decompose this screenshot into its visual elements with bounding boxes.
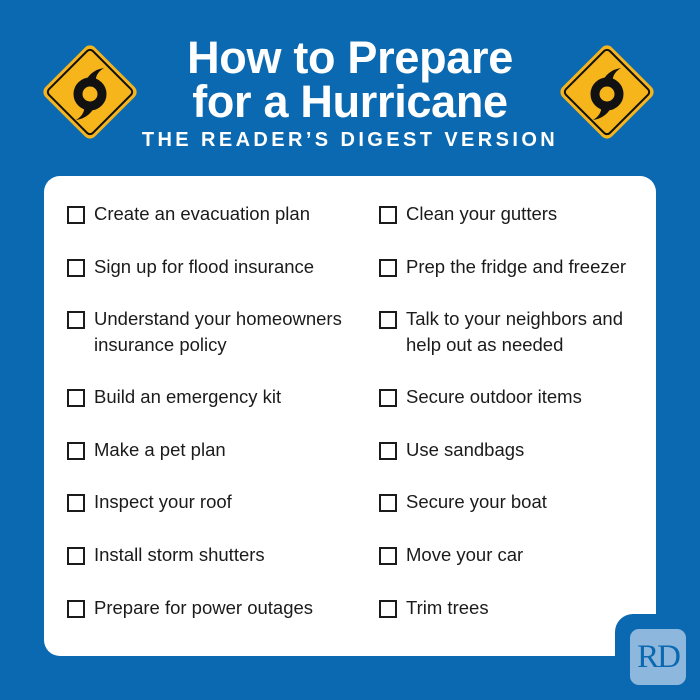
left column items: insurance policy bbox=[94, 334, 227, 355]
logo corner notch bbox=[615, 614, 700, 700]
right column items: Use sandbags bbox=[406, 439, 524, 460]
left column items: Create an evacuation plan bbox=[94, 203, 310, 224]
title: for a Hurricane bbox=[192, 76, 508, 127]
right column items bbox=[379, 203, 626, 618]
right column items: Clean your gutters bbox=[406, 203, 557, 224]
icon: hurricane sign left bbox=[43, 45, 137, 139]
panel: checklist bbox=[44, 176, 656, 656]
title: How to Prepare bbox=[187, 32, 513, 83]
right column items: Talk to your neighbors and bbox=[406, 308, 623, 329]
logo: RD: RD bbox=[637, 639, 679, 675]
left column items bbox=[67, 203, 342, 618]
right column items: Trim trees bbox=[406, 597, 489, 618]
right column items: Move your car bbox=[406, 544, 523, 565]
left column items: Understand your homeowners bbox=[94, 308, 342, 329]
left column items: Inspect your roof bbox=[94, 491, 232, 512]
left column items: Build an emergency kit bbox=[94, 386, 281, 407]
right column items: Secure outdoor items bbox=[406, 386, 582, 407]
left column items: Install storm shutters bbox=[94, 544, 265, 565]
left column items: Make a pet plan bbox=[94, 439, 226, 460]
logo: RD bbox=[630, 629, 686, 685]
left column items: Sign up for flood insurance bbox=[94, 256, 314, 277]
right column items: help out as needed bbox=[406, 334, 563, 355]
icon: hurricane sign right bbox=[560, 45, 654, 139]
right column items: Prep the fridge and freezer bbox=[406, 256, 626, 277]
right column items: Secure your boat bbox=[406, 491, 547, 512]
title bbox=[187, 32, 513, 127]
subtitle: THE READER’S DIGEST VERSION bbox=[142, 129, 558, 151]
left column items: Prepare for power outages bbox=[94, 597, 313, 618]
